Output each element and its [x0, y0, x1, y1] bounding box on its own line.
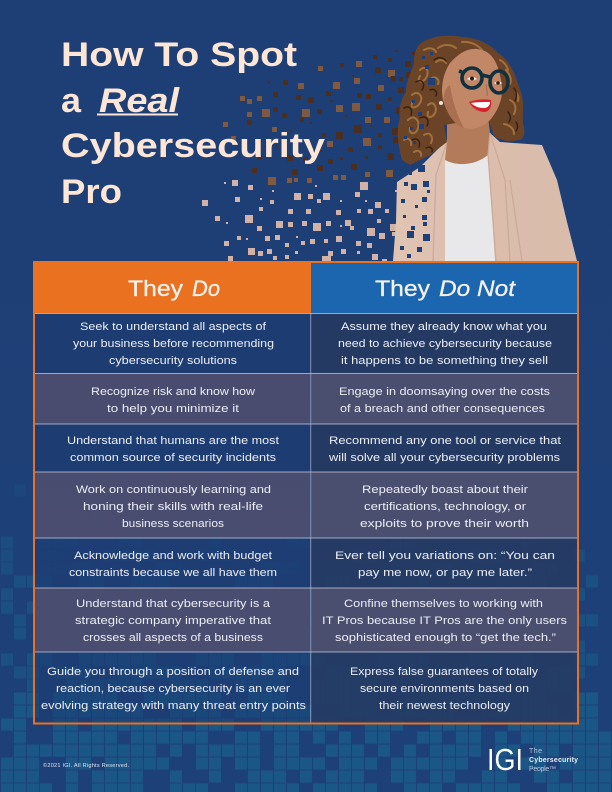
hair curl highlights — [404, 42, 518, 156]
row 1 — [35, 314, 310, 374]
header: they do not — [311, 263, 577, 313]
row 6: crosses all aspects of a business — [83, 632, 263, 644]
row 4: certifications, technology, or — [364, 501, 526, 513]
row 7: reaction, because cybersecurity is an ever — [56, 683, 290, 695]
row 1: need to achieve cybersecurity because — [338, 338, 552, 350]
row 6 — [35, 588, 310, 652]
row 4: business scenarios — [122, 518, 224, 530]
row 2 — [311, 374, 577, 424]
header: they do — [33, 261, 311, 313]
row 1: your business before recommending — [73, 338, 274, 350]
glasses — [459, 68, 508, 93]
row 4: Repeatedly boast about their — [362, 484, 528, 496]
row 4: exploits to prove their worth — [360, 518, 529, 530]
row 3: Recommend any one tool or service that — [329, 435, 562, 447]
row 5: Ever tell you variations on: “You can — [335, 550, 555, 562]
header: they do not: They — [375, 276, 430, 301]
row 7: Guide you through a position of defense and — [47, 666, 299, 678]
row 3 — [35, 424, 310, 472]
title: Pro — [61, 173, 122, 211]
row 7 — [311, 652, 577, 723]
title: Cybersecurity — [61, 127, 325, 165]
header: they do not: Do Not — [439, 276, 516, 301]
nose shadow — [486, 84, 487, 96]
logo: IGI The Cybersecurity People: The — [529, 748, 542, 755]
shirt — [445, 155, 495, 261]
row 1: it happens to be something they sell — [341, 355, 548, 367]
comparison table — [33, 261, 578, 724]
face — [442, 49, 502, 129]
logo: IGI The Cybersecurity People: IGI — [487, 742, 523, 777]
row 2: to help you minimize it — [107, 403, 240, 415]
row 7: secure environments based on — [360, 683, 529, 695]
lapels — [433, 133, 522, 261]
neck — [445, 116, 490, 164]
row 4 — [311, 472, 577, 538]
row 7: evolving strategy with many threat entry points — [41, 700, 306, 712]
row 5: Acknowledge and work with budget — [74, 550, 273, 562]
logo: IGI The Cybersecurity People — [487, 742, 578, 777]
row 3 — [311, 424, 577, 472]
eyes — [467, 77, 502, 84]
title: a — [61, 82, 82, 120]
row 6 — [311, 588, 577, 652]
row 4 — [35, 472, 310, 538]
row 4: Work on continuously learning and — [76, 484, 271, 496]
row 5 — [35, 538, 310, 588]
row 6: IT Pros because IT Pros are the only users — [322, 615, 567, 627]
face shadow — [444, 85, 464, 128]
row 7: their newest technology — [379, 700, 510, 712]
particles: dark brown hair squares — [223, 46, 430, 185]
row 1 — [311, 314, 577, 374]
header: they do: They — [128, 276, 183, 301]
row 6: strategic company imperative that — [75, 615, 272, 627]
row 3: Understand that humans are the most — [67, 435, 280, 447]
row 7: Express false guarantees of totally — [350, 666, 538, 678]
column: they do — [33, 261, 311, 723]
row 2: of a breach and other consequences — [340, 403, 545, 415]
row 1: cybersecurity solutions — [109, 355, 237, 367]
header: they do: Do — [192, 276, 220, 301]
blazer — [393, 133, 577, 261]
row 2 — [35, 374, 310, 424]
row 5: constraints because we all have them — [69, 567, 277, 579]
title — [61, 36, 325, 211]
column: they do not — [311, 263, 577, 723]
row 1: Assume they already know what you — [341, 321, 547, 333]
row 1: Seek to understand all aspects of — [80, 321, 267, 333]
logo: IGI The Cybersecurity People: People™ — [529, 766, 556, 773]
particles: skin-tone jacket squares — [202, 180, 400, 262]
table grid lines and orange border — [34, 262, 578, 724]
copyright: ©2021 IGI. All Rights Reserved. — [43, 762, 129, 769]
row 4: honing their skills with real-life — [83, 501, 263, 513]
row 7 — [35, 652, 310, 723]
row 6: sophisticated enough to “get the tech.” — [335, 632, 556, 644]
photo: woman with curly hair and glasses — [393, 36, 577, 261]
blue dissolve squares over woman — [400, 52, 435, 258]
title: Real — [99, 82, 181, 120]
earring — [439, 101, 443, 105]
hair — [398, 36, 524, 165]
row 5 — [311, 538, 577, 588]
row 3: common source of security incidents — [70, 452, 276, 464]
row 6: Confine themselves to working with — [344, 598, 543, 610]
row 2: Engage in doomsaying over the costs — [339, 386, 550, 398]
smile — [469, 99, 491, 112]
row 2: Recognize risk and know how — [91, 386, 256, 398]
row 3: will solve all your cybersecurity problems — [328, 452, 560, 464]
row 6: Understand that cybersecurity is a — [76, 598, 271, 610]
logo: IGI The Cybersecurity People: Cybersecurity — [529, 757, 578, 764]
title: How To Spot — [61, 36, 297, 74]
row 5: pay me now, or pay me later.” — [358, 567, 532, 579]
